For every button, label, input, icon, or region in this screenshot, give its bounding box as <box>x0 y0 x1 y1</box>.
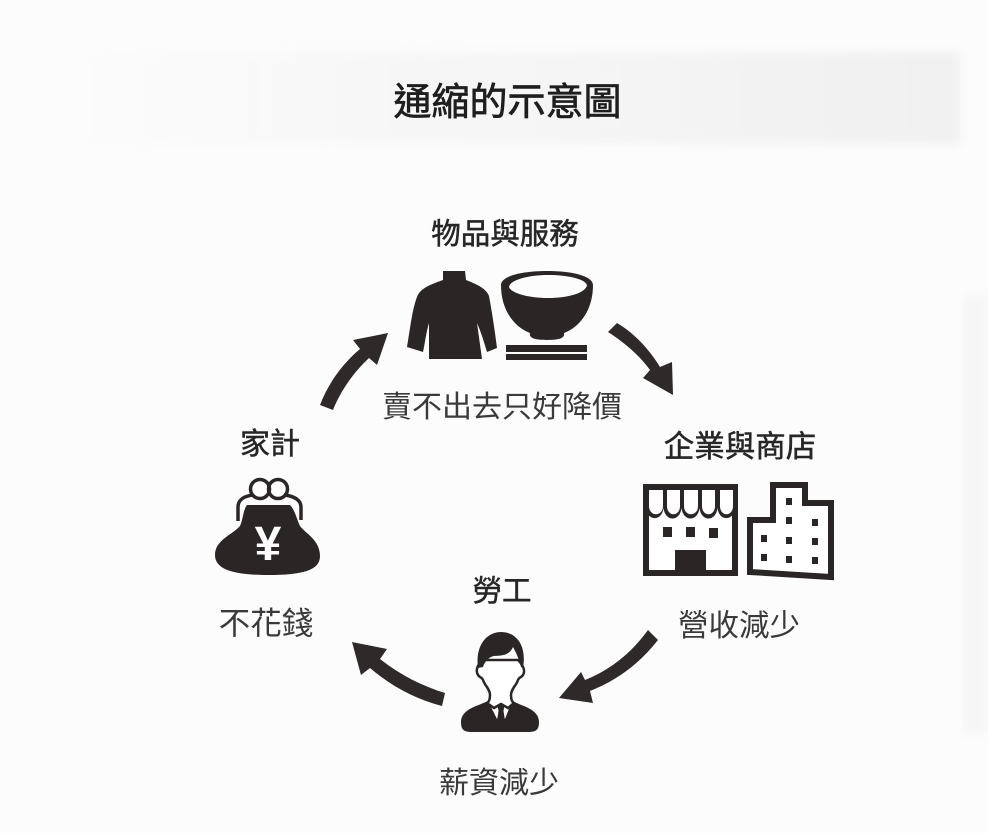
arrow: households to goods <box>320 333 388 410</box>
heading: goods and services: 物品與服務 <box>431 218 579 251</box>
node: households <box>215 428 320 641</box>
arrow: workers to households <box>352 642 445 706</box>
heading: companies and shops: 企業與商店 <box>664 430 816 464</box>
node: companies and shops <box>645 430 831 643</box>
caption: revenue falls: 營收減少 <box>678 609 800 643</box>
caption: wages fall: 薪資減少 <box>439 767 559 800</box>
icon: coin purse with yen <box>215 480 320 575</box>
icon: rice bowl <box>501 271 593 360</box>
node: goods and services <box>382 218 622 424</box>
heading: households: 家計 <box>240 428 300 461</box>
icon: sweater <box>407 271 497 359</box>
icon: office building <box>750 485 831 577</box>
icon: shop <box>645 486 736 573</box>
arrow: goods to companies <box>608 323 673 395</box>
title: 通縮的示意圖 <box>393 82 622 124</box>
heading: workers: 勞工 <box>472 575 532 608</box>
icon: businessman <box>461 632 539 732</box>
arrow: companies to workers <box>559 630 658 703</box>
node: workers <box>439 575 559 800</box>
icon: coin purse with yen: ¥ <box>255 518 282 571</box>
caption: forced to cut prices: 賣不出去只好降價 <box>382 391 622 424</box>
caption: not spending: 不花錢 <box>219 605 313 641</box>
